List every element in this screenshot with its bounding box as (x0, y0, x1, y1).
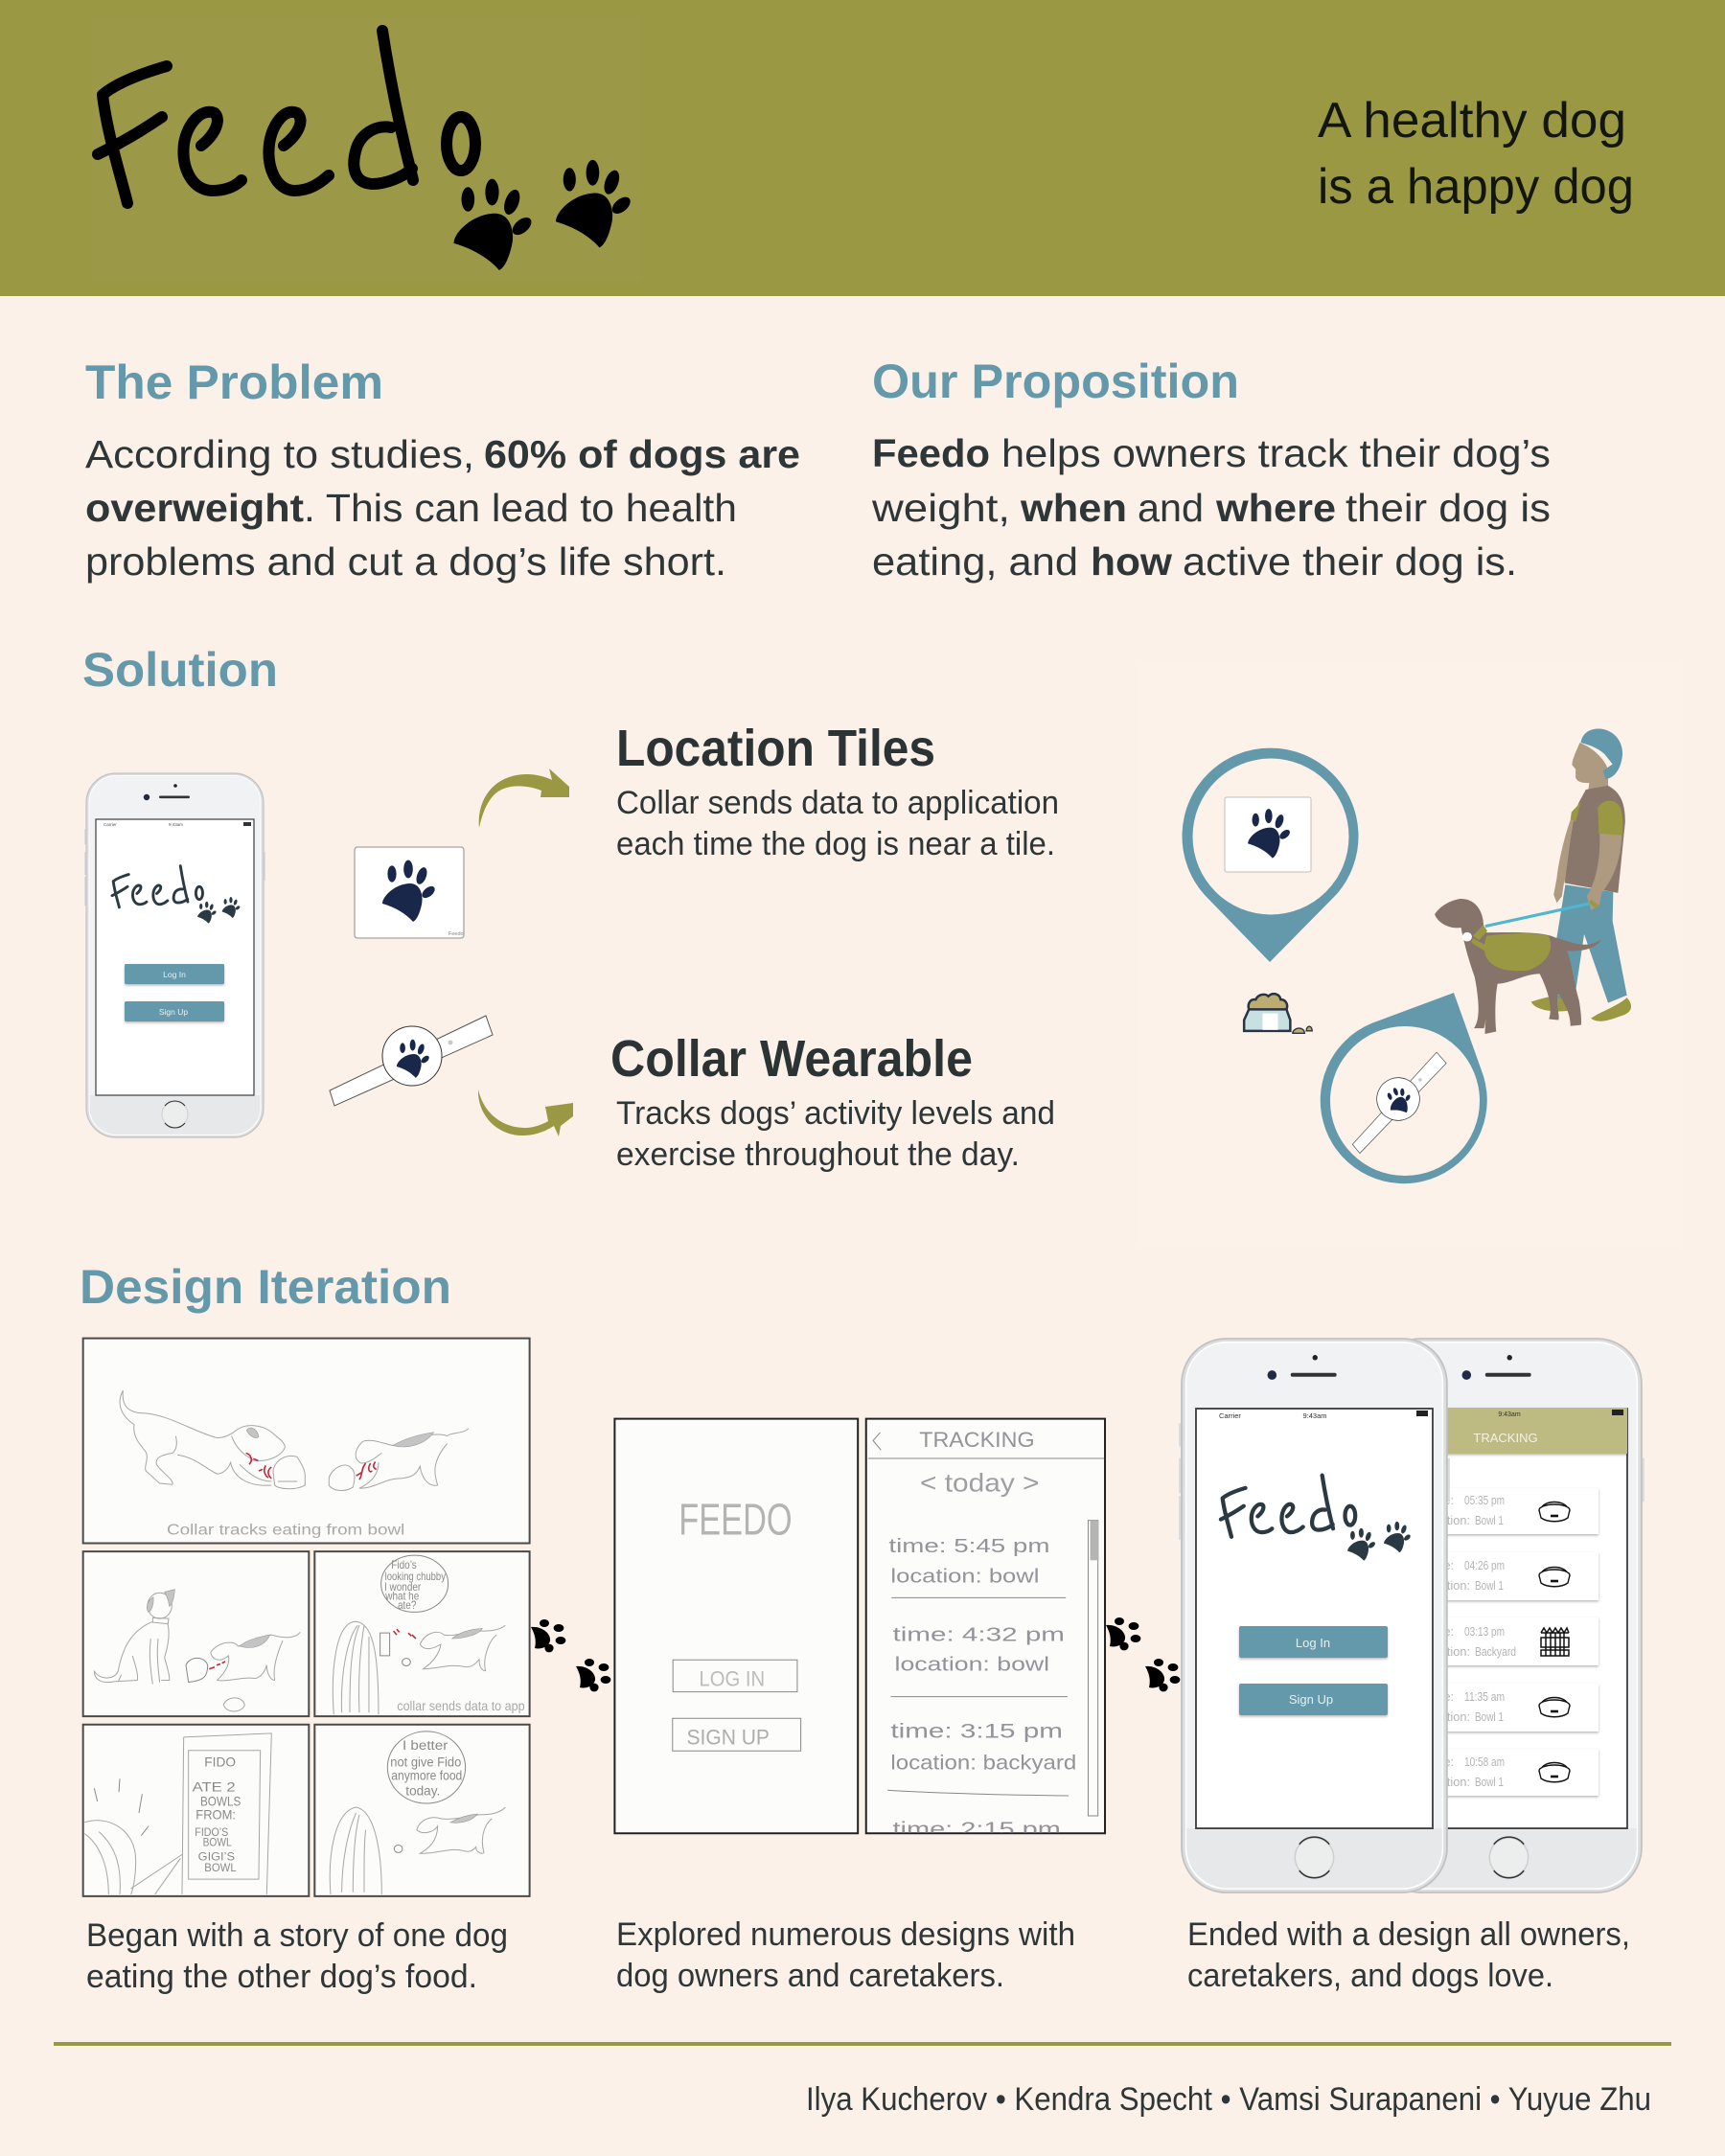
description: collar wearable: Tracks dogs’ activity levels and (616, 1095, 1055, 1132)
footer: authors: Ilya Kucherov • Kendra Specht • Vamsi Surapaneni • Yuyue Zhu (806, 2081, 1651, 2118)
storyboard: better not feed: today. (405, 1783, 440, 1799)
storyboard panels (83, 1339, 530, 1896)
caption: storyboard: Began with a story of one dog (86, 1917, 508, 1954)
caption: final design: caretakers, and dogs love. (1187, 1958, 1553, 1994)
storyboard: better not feed: anymore food (391, 1769, 462, 1783)
storyboard: fido report on phone: BOWLS (200, 1793, 242, 1809)
icons: bowl and fence (1539, 1502, 1570, 1782)
person: hair (1580, 728, 1622, 779)
description: collar wearable (616, 1095, 1055, 1173)
tracking list rows: time: (1428, 1755, 1454, 1769)
phone: login screen (84, 773, 265, 1137)
heading: solution: Solution (82, 643, 278, 697)
illustration: dog walking scene (1137, 661, 1683, 1248)
storyboard: collar sends data: collar sends data to app (397, 1699, 525, 1713)
wireframe: login sketch: LOG IN (700, 1668, 765, 1691)
text: proposition description: their dog is (1346, 486, 1551, 530)
person: near arm (1587, 832, 1622, 910)
tracking list rows: Bowl 1 (1475, 1514, 1504, 1527)
icon: location tile: Feedo (448, 931, 464, 937)
storyboard: fido report on phone: BOWL (203, 1837, 232, 1849)
tracking list rows: time: (1428, 1625, 1454, 1639)
dog: harness (1471, 925, 1551, 971)
caption: storyboard: eating the other dog’s food. (86, 1959, 477, 1995)
storyboard: fido report on phone: ATE 2 (193, 1778, 236, 1795)
panel: the problem (85, 356, 800, 584)
storyboard: better not feed: not give Fido (390, 1755, 461, 1770)
description: collar wearable: exercise throughout the day. (616, 1136, 1020, 1173)
wireframe: tracking sketch: time: 4:32 pm (892, 1623, 1065, 1645)
heading: the problem: The Problem (85, 356, 383, 409)
description: location tiles: Collar sends data to application (616, 785, 1059, 821)
heading: our proposition: Our Proposition (872, 355, 1239, 408)
tracking list rows: Location: (1420, 1776, 1470, 1789)
storyboard: fido report on phone: BOWL (204, 1862, 237, 1874)
person: sleeves (1571, 801, 1622, 836)
wireframe: tracking sketch: location: bowl (890, 1565, 1039, 1587)
wireframe: tracking sketch: < today > (920, 1469, 1039, 1498)
tracking list rows: Bowl 1 (1475, 1579, 1504, 1593)
arrow: to location tiles (479, 768, 569, 828)
person: head and far arm (1553, 743, 1608, 903)
text: problem description: problems and cut a dog’s life short. (85, 539, 726, 584)
caption: storyboard (86, 1917, 508, 1995)
panel: our proposition (871, 355, 1551, 584)
wireframe: login sketch (614, 1419, 858, 1833)
phone: final login screen: 9:43am (1302, 1411, 1327, 1420)
pin: collar (1321, 993, 1487, 1183)
tracking list rows: Location: (1420, 1710, 1470, 1724)
phone: tracking screen: 9:43am (1498, 1411, 1521, 1418)
person: vest (1565, 786, 1625, 893)
phone: login screen: Carrier (104, 822, 117, 827)
tracking list rows: Location: (1420, 1514, 1470, 1527)
caption: wireframes: dog owners and caretakers. (616, 1958, 1004, 1994)
text: proposition description: weight, (871, 486, 1010, 530)
wireframe: tracking sketch: time: 2:15 pm (892, 1818, 1061, 1841)
icon: collar wearable (330, 1016, 493, 1106)
text: proposition description (871, 431, 1551, 584)
tracking list rows: 10:58 am (1464, 1755, 1505, 1769)
phone: final login screen: Carrier (1219, 1411, 1241, 1420)
storyboard: collar sends data: looking chubby (385, 1571, 446, 1583)
heading: design iteration: Design Iteration (80, 1260, 451, 1314)
storyboard: better not feed (314, 1725, 530, 1896)
phone: final login screen: Sign Up (1289, 1692, 1333, 1707)
wireframe: tracking sketch (866, 1419, 1105, 1841)
tracking list rows: time: (1428, 1690, 1454, 1704)
wireframe sketches (614, 1419, 1105, 1841)
text block: collar wearable (610, 1030, 1055, 1173)
text: problem description: . This can lead to health (304, 486, 737, 530)
phone: final login screen (1179, 1339, 1450, 1892)
tracking list rows: time: (1428, 1559, 1454, 1572)
text: problem description (85, 432, 800, 584)
figure: person and dog (1435, 728, 1631, 1034)
wireframe: tracking sketch: time: 3:15 pm (890, 1720, 1063, 1743)
header band (0, 0, 1725, 296)
icon: food bowl (1244, 994, 1312, 1033)
wireframe: tracking sketch: location: backyard (890, 1752, 1076, 1775)
phone: login screen: 9:43am (169, 822, 183, 827)
storyboard: collar tracks eating: Collar tracks eating from bowl (167, 1522, 404, 1539)
text: problem description: According to studies, (85, 432, 474, 476)
tracking list rows: 11:35 am (1464, 1690, 1505, 1704)
paw trail: storyboard to wireframes (531, 1619, 610, 1691)
storyboard: fido report on phone: GIGI’S (198, 1851, 235, 1864)
text: problem description: 60% of dogs are (484, 432, 800, 476)
dog: body (1435, 899, 1601, 1034)
text: problem description: overweight (85, 486, 304, 530)
wireframe: tracking sketch: TRACKING (919, 1429, 1035, 1452)
description: location tiles (616, 785, 1059, 862)
storyboard: collar sends data: what he (384, 1591, 419, 1603)
icon: location tile (355, 847, 464, 938)
tracking list rows: Bowl 1 (1475, 1710, 1504, 1724)
text: proposition description: helps owners track their dog’s (1001, 431, 1551, 475)
caption: final design (1187, 1916, 1630, 1994)
storyboard: fido report on phone: FROM: (196, 1807, 236, 1823)
tracking list rows: Location: (1420, 1579, 1470, 1593)
tracking list rows: 04:26 pm (1464, 1559, 1505, 1572)
phone: tracking screen (1373, 1339, 1644, 1892)
tracking list rows: Backyard (1475, 1645, 1516, 1659)
tagline: A healthy dog (1318, 93, 1626, 149)
wireframe: login sketch: FEEDO (678, 1495, 793, 1545)
tracking list rows: 03:13 pm (1464, 1625, 1505, 1639)
person: trousers (1556, 884, 1627, 1003)
phone: final login screen: Log In (1296, 1636, 1330, 1650)
text: proposition description: where (1215, 486, 1336, 530)
storyboard: collar sends data: I wonder (384, 1581, 422, 1594)
caption: final design: Ended with a design all owners, (1187, 1916, 1630, 1953)
leash (1485, 903, 1593, 927)
storyboard: fido report on phone (83, 1725, 309, 1896)
text: proposition description: eating, and (872, 539, 1078, 584)
logo: Feedo wordmark with paws (98, 31, 633, 270)
tracking list rows: 05:35 pm (1464, 1494, 1505, 1507)
wireframe: login sketch: SIGN UP (686, 1727, 770, 1750)
wireframe: tracking sketch: location: bowl (895, 1653, 1049, 1675)
storyboard: fido report on phone: FIDO’S (195, 1826, 228, 1839)
storyboard: collar sends data: Fido’s (391, 1559, 417, 1571)
storyboard: collar sends data: ate? (398, 1600, 416, 1612)
paw trail: wireframes to final design (1106, 1617, 1180, 1691)
storyboard: dog eating from bowl (83, 1551, 309, 1716)
tagline: is a happy dog (1318, 159, 1634, 215)
wireframe: tracking sketch: time: 5:45 pm (888, 1534, 1049, 1556)
description: location tiles: each time the dog is near a tile. (616, 826, 1055, 862)
tracking list rows: time: (1428, 1494, 1454, 1507)
text block: location tiles (616, 720, 1059, 862)
text: proposition description: active their dog is. (1183, 539, 1517, 584)
tagline (1318, 93, 1634, 215)
tracking list rows (1392, 1488, 1598, 1827)
person: shoes (1531, 996, 1631, 1021)
phone: login screen: Log In (163, 970, 186, 979)
tracking list rows: Location: (1420, 1645, 1470, 1659)
text: proposition description: how (1091, 539, 1172, 584)
arrow: to collar wearable (478, 1089, 573, 1136)
caption: wireframes: Explored numerous designs with (616, 1916, 1075, 1953)
tracking list rows: Bowl 1 (1475, 1776, 1504, 1789)
collar device (1462, 932, 1472, 942)
storyboard: fido report on phone: FIDO (204, 1754, 236, 1770)
heading: collar wearable: Collar Wearable (610, 1030, 973, 1088)
pin: location tile (1183, 748, 1359, 962)
storyboard: collar tracks eating (83, 1339, 530, 1543)
storyboard: better not feed: I better (402, 1738, 448, 1753)
heading: location tiles: Location Tiles (616, 720, 935, 777)
text: proposition description: Feedo (872, 431, 990, 475)
text: proposition description: when (1020, 486, 1127, 530)
phone: tracking screen: TRACKING (1473, 1431, 1538, 1445)
storyboard: collar sends data (314, 1551, 530, 1716)
text: proposition description: and (1138, 486, 1204, 530)
phone: login screen: Sign Up (159, 1007, 188, 1017)
caption: wireframes (616, 1916, 1075, 1994)
